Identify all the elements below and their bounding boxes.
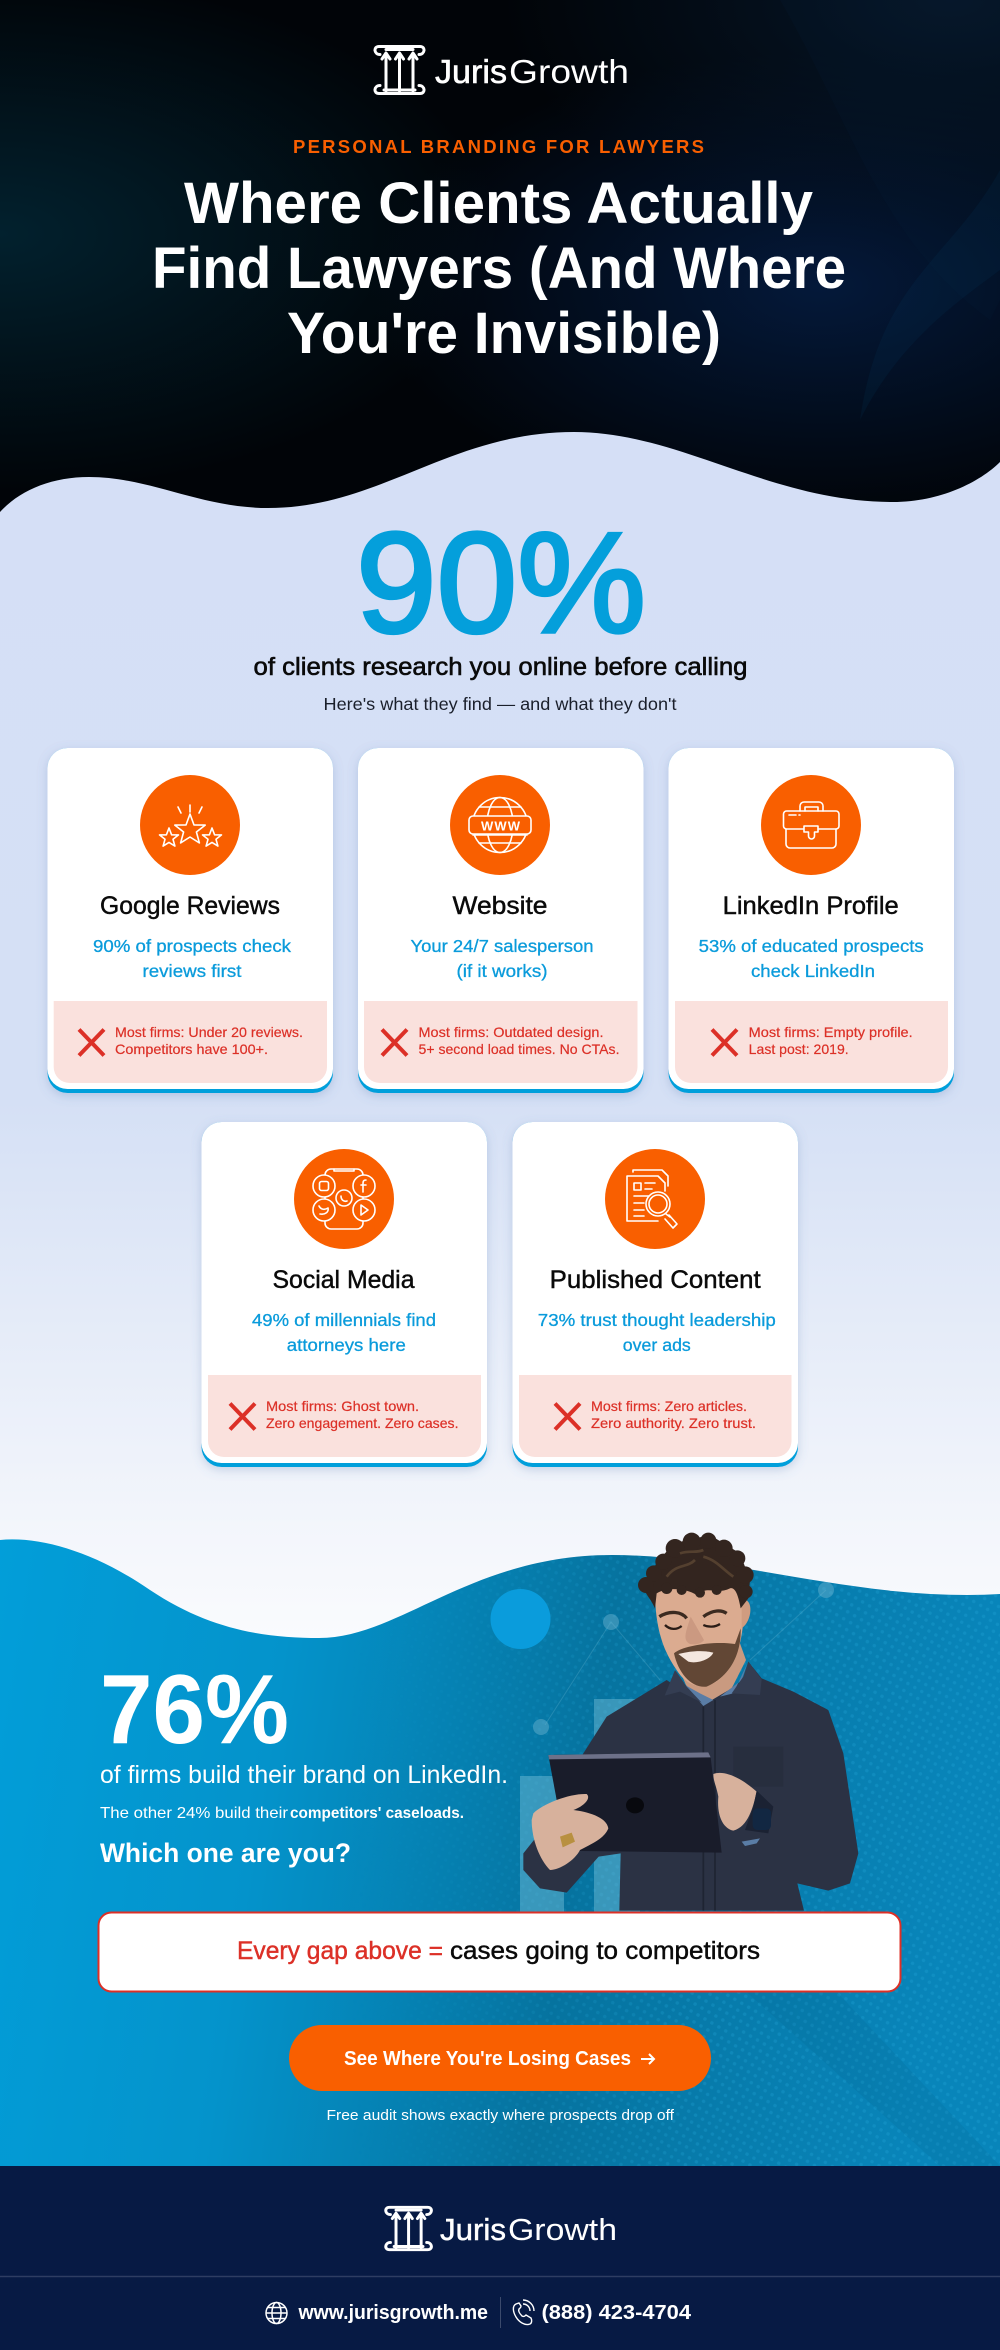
card: Website	[358, 748, 644, 1093]
button: CTA: See Where You're Losing Cases	[344, 2048, 631, 2070]
stat: 90%: 90%	[356, 504, 646, 663]
icon: social phone	[294, 1149, 394, 1249]
apple mark	[626, 1797, 644, 1813]
stat subcaption: Here's what they find — and what they don't	[324, 694, 677, 714]
wave: header bottom edge	[0, 432, 1000, 530]
logo wordmark: Growth	[508, 2212, 617, 2247]
footer panel	[0, 2166, 1000, 2350]
hand: left	[532, 1794, 608, 1870]
icon: globe www	[450, 775, 550, 875]
stat text	[410, 936, 594, 981]
title: Where Clients Actually	[184, 171, 813, 236]
CTA note: Free audit shows exactly where prospects drop off	[326, 2107, 675, 2124]
stat: 90%	[254, 504, 748, 681]
heading: LinkedIn Profile	[723, 892, 899, 920]
callout: every gap: cases going to competitors	[450, 1937, 760, 1965]
beard	[674, 1628, 741, 1687]
logo wordmark: Juris	[440, 2212, 506, 2247]
contact: website: www.jurisgrowth.me	[298, 2302, 488, 2324]
stat text: 73% trust thought leadership	[538, 1310, 776, 1330]
arrow	[641, 2054, 654, 2064]
watch	[745, 1791, 773, 1833]
stat text: attorneys here	[287, 1335, 406, 1355]
gap callout: Most firms: Outdated design.	[418, 1024, 604, 1040]
logo icon	[375, 46, 424, 94]
neck	[677, 1643, 746, 1705]
icon: stars	[140, 775, 240, 875]
button: CTA	[289, 2025, 711, 2091]
eyebrow: PERSONAL BRANDING FOR LAWYERS	[293, 136, 704, 157]
logo: top	[375, 46, 629, 94]
stat subtext: competitors' caseloads.	[290, 1805, 464, 1822]
logo: footer	[386, 2207, 617, 2250]
collar	[665, 1662, 762, 1703]
eyes and brows	[659, 1611, 727, 1618]
contact: phone	[513, 2300, 692, 2325]
card: LinkedIn Profile	[668, 748, 954, 1093]
gap callout: Last post: 2019.	[749, 1041, 849, 1057]
stat text	[93, 936, 291, 981]
gap callout: Competitors have 100+.	[115, 1041, 268, 1057]
stat text: 53% of educated prospects	[699, 936, 924, 956]
stat caption: of clients research you online before calling	[254, 653, 748, 681]
icon: globe	[266, 2302, 287, 2324]
stat text: reviews first	[142, 961, 242, 981]
stat text: check LinkedIn	[751, 961, 875, 981]
icon: phone	[513, 2300, 534, 2325]
question: Which one are you?	[100, 1838, 351, 1868]
card: Social Media	[202, 1122, 487, 1467]
card: Google Reviews	[48, 748, 333, 1093]
shirt	[523, 1662, 858, 1911]
callout: every gap	[98, 1912, 900, 1992]
stat text: over ads	[623, 1335, 691, 1355]
face	[655, 1577, 745, 1686]
tablet	[548, 1752, 722, 1853]
hair	[638, 1533, 754, 1608]
stat text: (if it works)	[456, 961, 548, 981]
icon: document magnifier	[605, 1149, 705, 1249]
light content background	[0, 420, 1000, 1660]
gap callout: Most firms: Zero articles.	[591, 1398, 747, 1414]
gap callout	[675, 1001, 948, 1083]
logo icon	[386, 2207, 431, 2250]
icon: globe www: WWW	[481, 818, 521, 834]
title: Find Lawyers (And Where	[152, 236, 846, 301]
stat text: Your 24/7 salesperson	[410, 936, 594, 956]
gap callout: Zero authority. Zero trust.	[591, 1415, 756, 1431]
nose shadow	[685, 1617, 704, 1644]
hand: right	[713, 1773, 757, 1831]
stat caption: of firms build their brand on LinkedIn.	[100, 1761, 508, 1789]
callout: every gap: Every gap above =	[237, 1937, 443, 1965]
stat: 76%: 76%	[100, 1654, 289, 1764]
gap callout: Most firms: Under 20 reviews.	[115, 1024, 303, 1040]
panel: LinkedIn section background	[0, 1530, 1000, 2170]
logo wordmark: Growth	[509, 53, 629, 90]
card: Published Content	[512, 1122, 798, 1467]
icon: briefcase	[761, 775, 861, 875]
gap callout	[208, 1375, 481, 1457]
title	[152, 171, 846, 366]
logo wordmark: Juris	[435, 53, 507, 90]
header panel	[0, 0, 1000, 520]
heading: Website	[452, 892, 548, 920]
stat subtext: The other 24% build their	[100, 1805, 289, 1822]
gap callout	[54, 1001, 327, 1083]
stat text	[252, 1310, 436, 1355]
stat text	[699, 936, 924, 981]
stat text: 49% of millennials find	[252, 1310, 436, 1330]
stat text: 90% of prospects check	[93, 936, 291, 956]
gap callout: Most firms: Empty profile.	[749, 1024, 913, 1040]
gap callout	[364, 1001, 638, 1083]
gap callout: Zero engagement. Zero cases.	[266, 1415, 458, 1431]
undershirt	[685, 1663, 747, 1706]
heading: Published Content	[550, 1266, 761, 1294]
gap callout: Most firms: Ghost town.	[266, 1398, 419, 1414]
gap callout: 5+ second load times. No CTAs.	[418, 1041, 620, 1057]
heading: Social Media	[272, 1266, 415, 1294]
gap callout	[519, 1375, 792, 1457]
contact: phone: (888) 423-4704	[542, 2302, 692, 2324]
photo: man with tablet	[523, 1533, 858, 1911]
stat text	[538, 1310, 776, 1355]
heading: Google Reviews	[100, 892, 280, 920]
title: You're Invisible)	[287, 301, 721, 366]
